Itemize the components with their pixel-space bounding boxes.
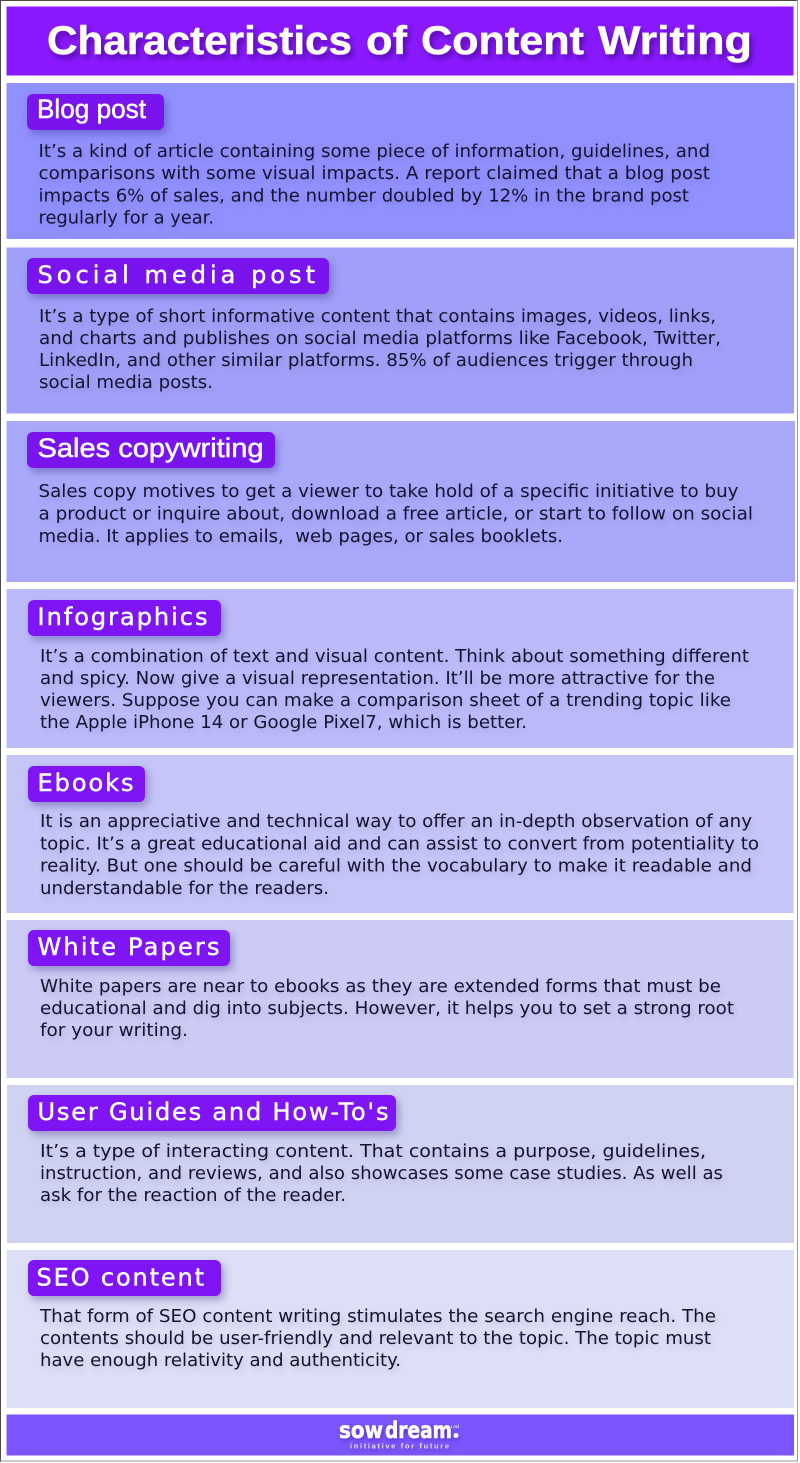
text block: ebooks: It is an appreciative and technical way to offer an in-depth observation of any	[40, 812, 752, 832]
heading: blog post: Blog post	[37, 94, 146, 124]
logo: sowdream	[339, 1418, 460, 1450]
panel: sales copywriting	[6, 421, 795, 582]
heading: sales copywriting: Sales copywriting	[38, 433, 264, 463]
text block: sales copywriting: Sales copy motives to get a viewer to take hold of a specific initiative to buy	[38, 482, 738, 502]
logo: sowdream: Ltd	[451, 1424, 460, 1429]
text block: social media post: LinkedIn, and other similar platforms. 85% of audiences trigger through	[39, 351, 693, 371]
heading: infographics	[28, 600, 221, 636]
logo: sowdream: initiative for future	[350, 1442, 449, 1450]
text block: user guides: ask for the reaction of the reader.	[40, 1186, 346, 1206]
title: of	[366, 19, 408, 63]
panel: ebooks	[6, 755, 794, 913]
text block: blog post: regularly for a year.	[38, 208, 214, 228]
text block: user guides	[40, 1142, 723, 1206]
text block: ebooks: topic. It’s a great educational aid and can assist to convert from potentiality to	[40, 834, 759, 854]
text block: white papers	[40, 977, 734, 1041]
text block: sales copywriting: a product or inquire about, download a free article, or start to follow on social	[38, 504, 753, 524]
title: Content	[421, 19, 584, 63]
text block: blog post: impacts 6% of sales, and the number doubled by 12% in the brand post	[38, 186, 689, 206]
panel: infographics	[6, 589, 794, 748]
text block: ebooks: reality. But one should be careful with the vocabulary to make it readable and	[40, 856, 752, 876]
panel: user guides	[7, 1085, 794, 1243]
text block: sales copywriting	[38, 482, 753, 547]
text block: infographics: viewers. Suppose you can make a comparison sheet of a trending topic like	[40, 691, 731, 711]
text block: seo content: have enough relativity and authenticity.	[40, 1351, 401, 1371]
panel: blog post	[6, 83, 794, 239]
logo: sowdream: dream	[385, 1418, 452, 1444]
footer band	[6, 1414, 794, 1456]
heading: ebooks: Ebooks	[38, 769, 134, 797]
text block: ebooks	[40, 812, 759, 899]
text block: blog post	[38, 142, 710, 228]
text block: social media post: It’s a type of short informative content that contains images, videos, links,	[39, 307, 716, 327]
heading: blog post	[27, 94, 164, 130]
text block: blog post: It’s a kind of article containing some piece of information, guidelines, and	[38, 142, 710, 162]
text block: sales copywriting: media. It applies to emails, web pages, or sales booklets.	[38, 527, 563, 547]
heading: ebooks	[28, 766, 145, 802]
logo: sowdream: sow	[339, 1418, 383, 1444]
text block: user guides: It’s a type of interacting content. That contains a purpose, guidelines,	[40, 1142, 706, 1162]
heading: seo content: SEO content	[36, 1264, 204, 1292]
panel: seo content	[6, 1250, 794, 1408]
text block: ebooks: understandable for the readers.	[40, 879, 329, 899]
heading: user guides: User Guides and How-To's	[38, 1098, 388, 1126]
text block: seo content: That form of SEO content writing stimulates the search engine reach. The	[39, 1307, 716, 1327]
title banner	[6, 6, 794, 76]
text block: seo content: contents should be user-friendly and relevant to the topic. The topic must	[40, 1329, 711, 1349]
title	[47, 19, 752, 63]
text block: white papers: educational and dig into subjects. However, it helps you to set a strong root	[40, 999, 734, 1019]
text block: infographics: It’s a combination of text and visual content. Think about something different	[40, 647, 749, 667]
heading: social media post: Social media post	[38, 261, 315, 289]
text block: social media post: and charts and publishes on social media platforms like Facebook, Twitter,	[39, 329, 721, 349]
text block: infographics: the Apple iPhone 14 or Google Pixel7, which is better.	[40, 713, 527, 733]
text block: social media post: social media posts.	[39, 373, 213, 393]
text block: infographics	[40, 647, 749, 733]
title: Characteristics	[47, 19, 352, 63]
text block: infographics: and spicy. Now give a visual representation. It’ll be more attractive for the	[40, 669, 715, 689]
panel: white papers	[6, 920, 794, 1078]
text block: user guides: instruction, and reviews, and also showcases some case studies. As well as	[40, 1164, 723, 1184]
heading: seo content	[28, 1260, 221, 1296]
text block: blog post: comparisons with some visual impacts. A report claimed that a blog post	[38, 164, 710, 184]
panel: social media post	[6, 248, 794, 414]
text block: social media post	[39, 307, 721, 393]
text block: white papers: White papers are near to ebooks as they are extended forms that must be	[40, 977, 721, 997]
text block: seo content	[39, 1307, 716, 1371]
heading: infographics: Infographics	[38, 603, 208, 631]
heading: white papers: White Papers	[38, 933, 220, 961]
title: Writing	[598, 19, 752, 63]
text block: white papers: for your writing.	[40, 1021, 188, 1041]
